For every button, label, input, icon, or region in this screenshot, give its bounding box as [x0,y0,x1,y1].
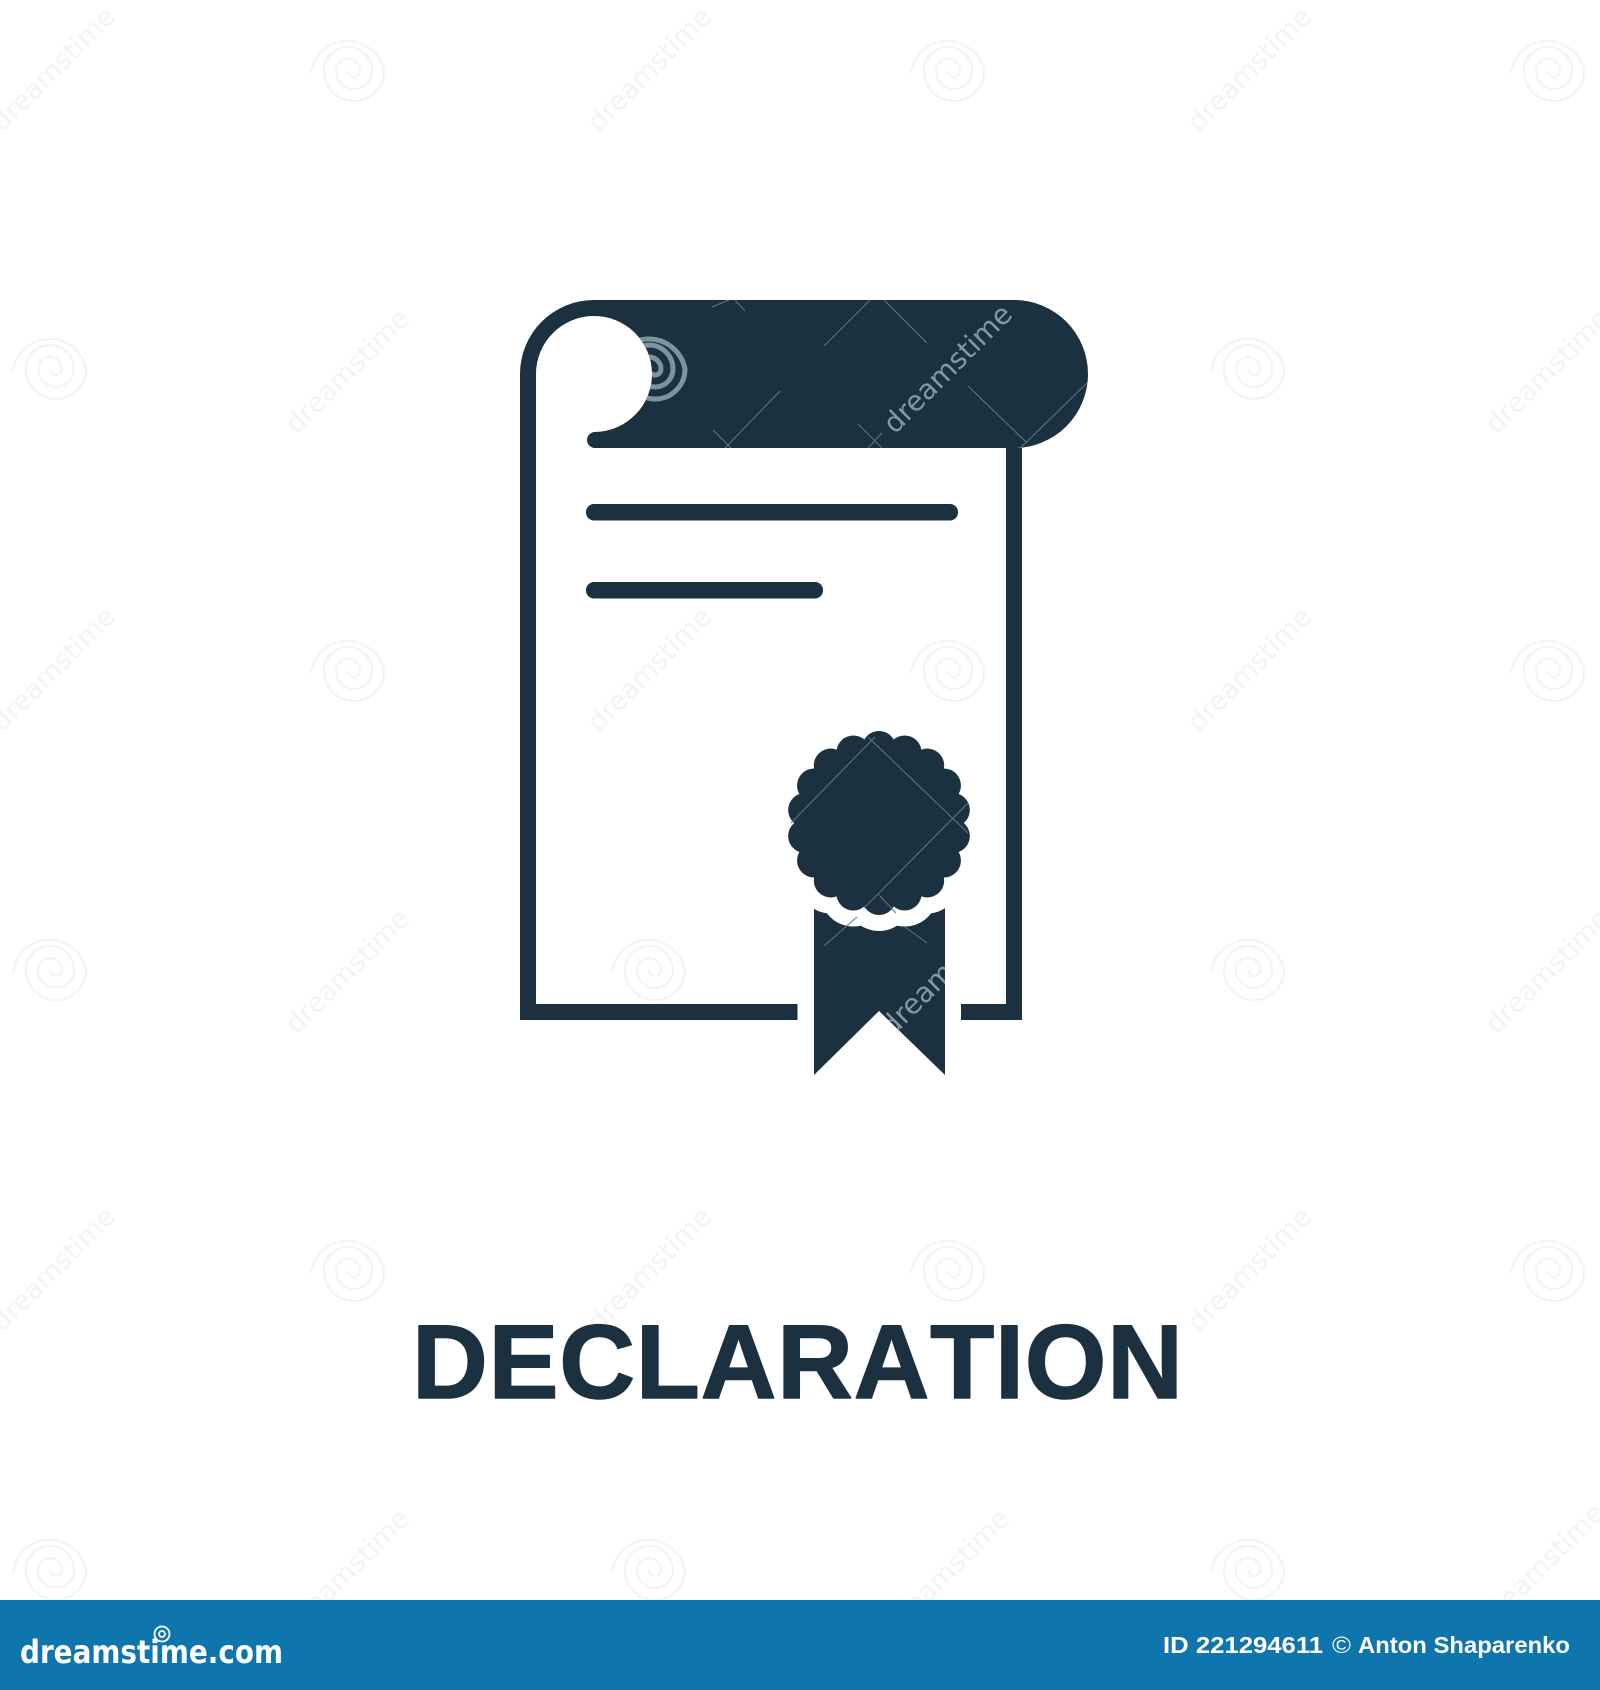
watermark pattern: dreamstime [879,1503,1016,1640]
logo swirl [154,1626,170,1642]
image id and author credit: Anton Shaparenko [1358,1632,1570,1658]
watermark over icon [612,298,1088,1043]
seal [788,731,970,915]
watermark pattern: dreamstime [1181,1,1318,138]
watermark pattern: dreamstime [1181,601,1318,738]
watermark pattern: dreamstime [581,1,718,138]
image id and author credit [1163,1632,1570,1658]
seal halo [772,715,986,931]
watermark pattern: dreamstime [279,903,416,1040]
scroll document outline and rolled top [520,300,1088,1020]
dreamstime logo: dreamstime.com [20,1633,283,1671]
text line two [586,582,823,598]
title: DECLARATION [412,1304,1183,1421]
watermark pattern: dreamstime [279,1503,416,1640]
watermark pattern: dreamstime [581,601,718,738]
text line one [586,504,958,520]
watermark over icon: dreamstime [874,901,1016,1043]
image id and author credit: ID 221294611 [1163,1632,1323,1658]
image id and author credit: © [1332,1632,1351,1658]
ribbon [814,905,945,1075]
watermark pattern: dreamstime [279,303,416,440]
watermark pattern: dreamstime [581,1201,718,1338]
footer bar [0,1600,1600,1690]
watermark over icon: dreamstime [877,298,1019,440]
icon: declaration scroll with seal [520,298,1088,1075]
watermark pattern: dreamstime [1181,1201,1318,1338]
